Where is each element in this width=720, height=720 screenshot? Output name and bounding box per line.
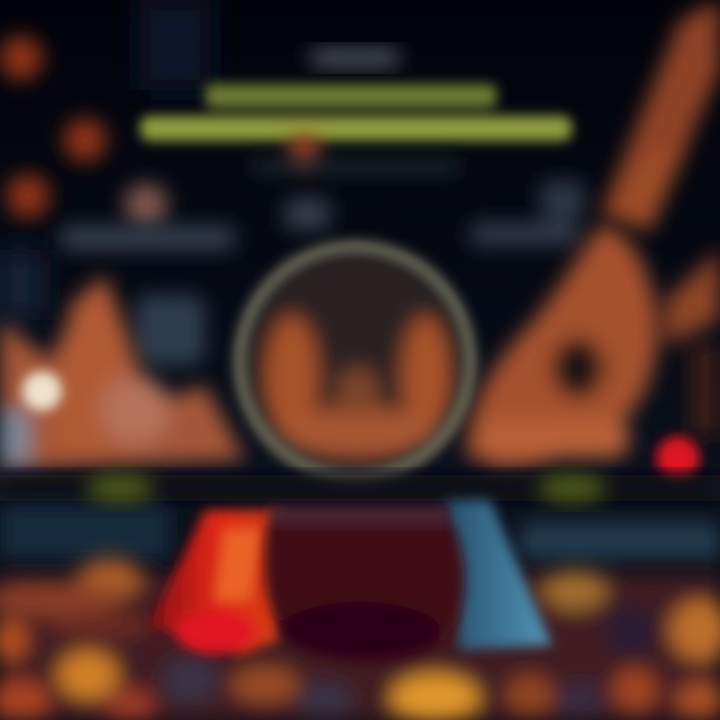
- dark band: [0, 475, 720, 501]
- cauldron: blue right side: [445, 500, 552, 650]
- right hand: [465, 225, 720, 468]
- right arm: [600, 0, 720, 232]
- heading: green title lines: [140, 84, 572, 141]
- red indicator dot: [656, 436, 700, 480]
- green markers: [86, 473, 606, 503]
- decorative orange dots: [0, 36, 320, 227]
- magnifier ring: [240, 247, 470, 477]
- white highlight: [22, 371, 62, 411]
- blue panels: [0, 505, 720, 560]
- top background columns: [0, 0, 210, 320]
- left flames: [0, 275, 245, 470]
- cauldron: dark body: [265, 505, 464, 662]
- magnifier lens interior: [245, 252, 465, 472]
- subheading text bars: [60, 160, 585, 365]
- heading: small title bar: [310, 48, 400, 68]
- bottom tiles: [0, 558, 720, 720]
- cauldron: red left side: [150, 510, 280, 655]
